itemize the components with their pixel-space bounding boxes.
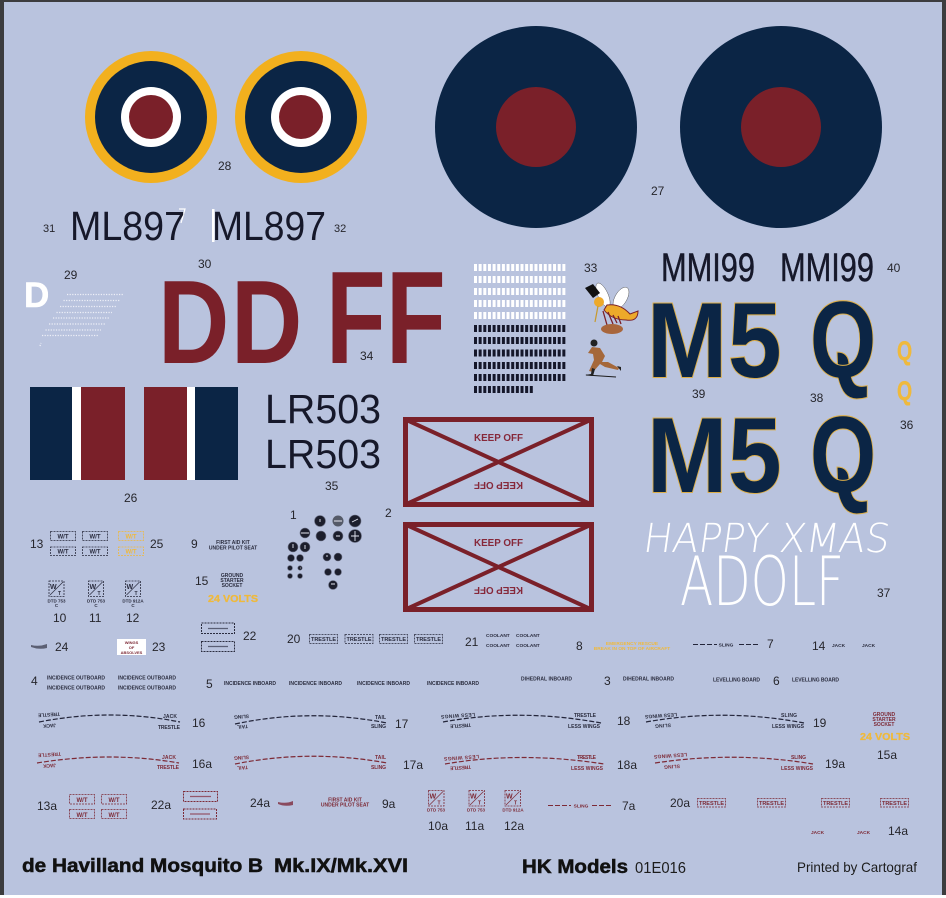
decal 21: coolant stencils: COOLANT [486, 643, 510, 649]
decal 23: white badge: 23 [152, 640, 166, 654]
decals 38 and 39: lower M5 Q code letters: M [647, 395, 727, 515]
decals 10 11 12: W/T weight stencils [47, 581, 144, 625]
decal 5: incidence inboard stencils: INCIDENCE INBOARD [289, 681, 342, 687]
decals 38 and 39: lower M5 Q code letters: 39 [692, 387, 706, 401]
decal 9: first aid kit stencil: UNDER PILOT SEAT [209, 546, 257, 552]
decals 10 11 12: W/T weight stencils: T [58, 591, 61, 597]
decal 19a: red sling less wings curved line [653, 751, 845, 772]
decals 10 11 12: W/T weight stencils: W [90, 584, 96, 591]
decal 7: sling line: 7 [767, 637, 774, 651]
decals 10a 11a 12a: red W/T stencils: T [438, 800, 441, 806]
decal 16a: red jack trestle curved line: JACK [42, 762, 56, 769]
decals 10 11 12: W/T weight stencils: C [131, 603, 135, 608]
title: aircraft name [22, 856, 408, 877]
decal 22a: red dashed placards: 22a [151, 798, 171, 812]
decal 15a: red ground starter socket [860, 712, 910, 762]
footer: printer credit: Printed by Cartograf [797, 859, 917, 875]
decal 35: serial LR503: LR503 [265, 431, 381, 477]
decal 35: serial LR503: LR503 [265, 386, 381, 432]
decal 23: white badge: WINGS [125, 640, 139, 645]
decals 38 and 39: lower M5 Q code letters [647, 387, 876, 515]
decals 10a 11a 12a: red W/T stencils: DTD 753 [467, 808, 485, 812]
walkway upper: KEEP OFF [474, 432, 524, 444]
decal 20: trestle boxes: TRESTLE [346, 637, 372, 643]
decal 19: sling less wings curved line: LESS WINGS [772, 724, 805, 730]
decal 40: serial MM199: MMI99 [780, 246, 874, 290]
decal 19: sling less wings curved line: LESS WINGS [644, 711, 677, 719]
decal 2: keep off walkway markings: 2 [385, 506, 392, 520]
decal 14: jack stencils: 14 [812, 639, 826, 653]
decal 4: incidence outboard stencils: INCIDENCE OUTBOARD [118, 676, 176, 682]
decal 17a: red tail sling curved line: TAIL [375, 755, 386, 761]
decal 13: black stencil tags: W/T [58, 534, 69, 540]
decal 9: first aid kit stencil: FIRST AID KIT [216, 540, 250, 546]
decal 18a: red trestle less wings curved line: TRESTLE [449, 763, 471, 771]
icon: running figure [585, 340, 621, 377]
decals 10 11 12: W/T weight stencils: 12 [126, 611, 140, 625]
decals 10a 11a 12a: red W/T stencils: DTD 912A [502, 808, 524, 812]
decal 15: ground starter socket and 24 volts [195, 573, 258, 605]
decal 19a: red sling less wings curved line: 19a [825, 757, 845, 771]
decal 9a: red first aid kit stencil [321, 797, 396, 811]
decal 17a: red tail sling curved line [234, 754, 423, 772]
decals 31 and 32: serial ML897 [43, 203, 346, 249]
decal 24: small squiggle stencil [31, 640, 69, 654]
decal 20a: red trestle boxes: TRESTLE [882, 801, 907, 807]
decal 3: dihedral inboard stencils: DIHEDRAL INBOARD [521, 676, 572, 682]
decal 27: pair of large type B roundels [435, 26, 882, 228]
decal 26: fin flash [30, 387, 238, 505]
decal 6: levelling board stencils: 6 [773, 674, 780, 688]
decal 1: instrument dials: 1 [290, 508, 297, 522]
decal 5: incidence inboard stencils: INCIDENCE INBOARD [427, 681, 479, 687]
decals 38 and 39: lower M5 Q code letters: Q [810, 394, 876, 515]
decal 16: jack trestle curved line: 16 [192, 716, 206, 730]
decal 9: first aid kit stencil [191, 537, 257, 552]
decal 33: mission tally bars: 33 [584, 261, 598, 275]
decal 23: white badge [117, 639, 166, 655]
decals 38 and 39: upper M5 Q code letters: M [647, 280, 727, 400]
walkway upper [406, 420, 592, 504]
decal 15a: red ground starter socket: STARTER [872, 717, 896, 723]
footer: manufacturer and product code: HK Models [522, 857, 628, 878]
decal 7a: red sling line: SLING [574, 804, 589, 810]
decal 34: red code letters FF [326, 244, 446, 391]
decal 6: levelling board stencils: LEVELLING BOARD [792, 678, 839, 684]
decal 20: trestle boxes: TRESTLE [311, 637, 336, 643]
decal 16: jack trestle curved line: TRESTLE [37, 710, 60, 718]
decals 38 and 39: lower M5 Q code letters: 38 [810, 391, 824, 405]
decal 24: small squiggle stencil: 24 [55, 640, 69, 654]
decal 15a: red ground starter socket: SOCKET [874, 722, 894, 728]
decal 20a: red trestle boxes: TRESTLE [759, 801, 784, 807]
decal 40: serial MM199: 40 [887, 261, 901, 275]
decal 16: jack trestle curved line: JACK [163, 714, 177, 720]
decal 40: serial MM199 [661, 246, 901, 290]
decal 15: ground starter socket and 24 volts: 15 [195, 574, 209, 588]
decal 16: jack trestle curved line: TRESTLE [158, 725, 181, 731]
decal 6: levelling board stencils [713, 674, 839, 688]
decal 33: mission tally bars [474, 261, 598, 390]
decal 19: sling less wings curved line: SLING [655, 721, 671, 729]
decal 20a: red trestle boxes: TRESTLE [823, 801, 848, 807]
decal 34: red code letters FF: F [326, 244, 386, 391]
footer: manufacturer and product code [522, 857, 686, 878]
decal 17: tail sling curved line: SLING [234, 713, 249, 720]
decal 18a: red trestle less wings curved line [443, 753, 637, 772]
decal 25: yellow stencil tags: W/T [126, 534, 137, 540]
decal 13a: red stencil tags: 13a [37, 799, 57, 813]
decal 4: incidence outboard stencils: INCIDENCE OUTBOARD [118, 686, 176, 692]
decal 18a: red trestle less wings curved line: LESS WINGS [571, 766, 604, 772]
decal 20a: red trestle boxes [670, 796, 908, 810]
decal 16: jack trestle curved line [37, 710, 206, 731]
decal 15: ground starter socket and 24 volts: GROUND [221, 573, 243, 579]
decal 23: white badge: OF [129, 645, 135, 650]
decals 38 and 39: lower M5 Q code letters: 5 [728, 395, 782, 515]
decals 38 and 39: upper M5 Q code letters: 5 [728, 280, 782, 400]
decal 17: tail sling curved line [234, 713, 409, 731]
walkway lower: KEEP OFF [473, 584, 523, 596]
decal 23: white badge: ABSOLVES [121, 650, 143, 655]
icon: mosquito nose art [585, 281, 638, 334]
decal 20: trestle boxes [287, 632, 442, 646]
decal 7a: red sling line: 7a [622, 799, 636, 813]
decal 22: dashed placards [202, 623, 257, 652]
title: aircraft name: de Havilland Mosquito B [22, 856, 263, 877]
decal 19: sling less wings curved line: 19 [813, 716, 827, 730]
decal 28: pair of type C1 roundels [85, 51, 367, 183]
decal 14a: red jack stencils: 14a [888, 824, 908, 838]
decal 17a: red tail sling curved line: 17a [403, 758, 423, 772]
decal 8: emergency rescue stencil [576, 639, 670, 653]
decal 14a: red jack stencils [811, 824, 908, 838]
decal 13a: red stencil tags: W/T [108, 813, 120, 819]
decals 10 11 12: W/T weight stencils: T [134, 591, 138, 597]
decal 29: white code letter and stencil stripes [24, 268, 123, 346]
decals 10 11 12: W/T weight stencils: W [50, 584, 57, 591]
decal 30: red code letters DD: 30 [198, 257, 212, 271]
decal 20a: red trestle boxes: TRESTLE [699, 801, 724, 807]
decal 16a: red jack trestle curved line: JACK [162, 755, 176, 761]
decal 13a: red stencil tags [37, 794, 126, 819]
decal 18a: red trestle less wings curved line: TRESTLE [577, 755, 597, 761]
decal 17a: red tail sling curved line: SLING [234, 754, 249, 761]
decal 36: small yellow Q letters: Q [897, 336, 912, 366]
decals 38 and 39: upper M5 Q code letters: Q [810, 279, 876, 400]
decal 37: hand written slogan [641, 516, 893, 622]
decals 10a 11a 12a: red W/T stencils [427, 790, 524, 833]
decal 7: sling line [693, 637, 774, 651]
decal 35: serial LR503 [265, 386, 381, 493]
decal 7: sling line: SLING [719, 642, 734, 648]
decals 10 11 12: W/T weight stencils: T [98, 591, 101, 597]
decal 14: jack stencils: JACK [862, 643, 876, 649]
decal 24a: red squiggle stencil: 24a [250, 796, 270, 810]
decal 13: black stencil tags: W/T [90, 534, 101, 540]
decal 40: serial MM199: MMI99 [661, 246, 755, 290]
decal 35: serial LR503: 35 [325, 479, 339, 493]
decal 19: sling less wings curved line [644, 711, 827, 730]
decal 18: trestle less wings curved line [440, 711, 631, 730]
decal 3: dihedral inboard stencils: 3 [604, 674, 611, 688]
decal 9a: red first aid kit stencil: FIRST AID KIT [328, 798, 362, 804]
decal 7a: red sling line [548, 799, 636, 813]
decal 36: small yellow Q letters: 36 [900, 418, 914, 432]
decal 37: hand written slogan: ADOLF [680, 543, 844, 622]
decal 30: red code letters DD [158, 256, 302, 389]
decal 21: coolant stencils [465, 633, 540, 649]
decals 10 11 12: W/T weight stencils: DTD 912A [122, 598, 144, 604]
decal 20: trestle boxes: TRESTLE [416, 637, 441, 643]
decal 14a: red jack stencils: JACK [811, 830, 825, 836]
decal 9a: red first aid kit stencil: UNDER PILOT SEAT [321, 802, 369, 808]
decal 18a: red trestle less wings curved line: LESS WINGS [443, 753, 479, 761]
decal 5: incidence inboard stencils: 5 [206, 677, 213, 691]
walkway upper: KEEP OFF [473, 479, 523, 491]
decal 21: coolant stencils: COOLANT [516, 633, 540, 639]
decals 10a 11a 12a: red W/T stencils: 12a [504, 819, 524, 833]
decal 4: incidence outboard stencils: INCIDENCE OUTBOARD [47, 686, 105, 692]
decals 10a 11a 12a: red W/T stencils: W [470, 794, 477, 800]
decal 15a: red ground starter socket: 24 VOLTS [860, 732, 910, 743]
decal 15: ground starter socket and 24 volts: STARTER [220, 578, 244, 584]
decals 10a 11a 12a: red W/T stencils: 10a [428, 819, 448, 833]
decal 18: trestle less wings curved line: TRESTLE [574, 713, 597, 719]
decal 9: first aid kit stencil: 9 [191, 537, 198, 551]
decal 14: jack stencils [812, 639, 876, 653]
decal 4: incidence outboard stencils [31, 674, 176, 692]
decal 26: fin flash: 26 [124, 491, 138, 505]
decal 14: jack stencils: JACK [832, 643, 846, 649]
decals 10 11 12: W/T weight stencils: 10 [53, 611, 67, 625]
decals 31 and 32: serial ML897: ML897 [70, 203, 185, 249]
decal 8: emergency rescue stencil: BREAK IN ON TOP OF AIRCRAFT [594, 646, 670, 652]
decals 10a 11a 12a: red W/T stencils: W [506, 794, 513, 800]
decal 5: incidence inboard stencils: INCIDENCE INBOARD [224, 681, 276, 687]
decal 2: keep off walkway markings [385, 420, 592, 610]
decal 17a: red tail sling curved line: TAIL [237, 764, 248, 770]
decal 30: red code letters DD: D [158, 256, 229, 389]
decal 19a: red sling less wings curved line: LESS WINGS [653, 751, 687, 759]
decal 13: black stencil tags: 13 [30, 537, 44, 551]
decal 25: yellow stencil tags [118, 532, 164, 556]
decal 13: black stencil tags: W/T [90, 550, 101, 556]
decal 16a: red jack trestle curved line: TRESTLE [37, 750, 61, 758]
decals 38 and 39: upper M5 Q code letters [647, 279, 876, 400]
decals 10 11 12: W/T weight stencils: 11 [89, 611, 102, 625]
decals 31 and 32: serial ML897: ML897 [212, 203, 326, 249]
decal 25: yellow stencil tags: 25 [150, 537, 164, 551]
footer: manufacturer and product code: 01E016 [635, 860, 686, 877]
decal 17: tail sling curved line: 17 [395, 717, 409, 731]
decal 5: incidence inboard stencils [206, 677, 479, 691]
decal 28: pair of type C1 roundels: 28 [218, 159, 232, 173]
decal 15: ground starter socket and 24 volts: SOCKET [222, 583, 242, 589]
decal 17: tail sling curved line: TAIL [237, 723, 248, 729]
decal 18: trestle less wings curved line: 18 [617, 714, 631, 728]
decals 10a 11a 12a: red W/T stencils: T [514, 800, 517, 806]
decal 16a: red jack trestle curved line [37, 750, 212, 771]
decal 13a: red stencil tags: W/T [108, 798, 120, 804]
decal 21: coolant stencils: COOLANT [516, 643, 540, 649]
decal 1: instrument dials [288, 508, 362, 590]
decal 18a: red trestle less wings curved line: 18a [617, 758, 637, 772]
decals 10a 11a 12a: red W/T stencils: T [478, 800, 481, 806]
decal 13a: red stencil tags: W/T [76, 813, 88, 819]
decal 21: coolant stencils: COOLANT [486, 633, 510, 639]
decal 20: trestle boxes: TRESTLE [381, 637, 406, 643]
decal 19a: red sling less wings curved line: SLING [791, 755, 806, 761]
decal 18: trestle less wings curved line: TRESTLE [449, 721, 471, 729]
decal 17a: red tail sling curved line: SLING [371, 765, 386, 771]
decal 18: trestle less wings curved line: LESS WINGS [568, 724, 601, 730]
decal 20: trestle boxes: 20 [287, 632, 301, 646]
decal 15a: red ground starter socket: 15a [877, 748, 897, 762]
decal 8: emergency rescue stencil: 8 [576, 639, 583, 653]
decals 10 11 12: W/T weight stencils: DTD 753 [87, 598, 105, 604]
decals 10 11 12: W/T weight stencils: C [94, 603, 98, 608]
decal 30: red code letters DD: D [231, 256, 302, 389]
decal 17: tail sling curved line: TAIL [375, 715, 386, 721]
decal 29: white code letter and stencil stripes: D [24, 276, 49, 315]
decal 9a: red first aid kit stencil: 9a [382, 797, 396, 811]
decal 8: emergency rescue stencil: EMERGENCY RESCUE [606, 641, 659, 647]
decal 15: ground starter socket and 24 volts: 24 VOLTS [208, 594, 258, 605]
decal 19a: red sling less wings curved line: LESS WINGS [781, 766, 814, 772]
decals 10a 11a 12a: red W/T stencils: DTD 753 [427, 808, 445, 812]
decal 25: yellow stencil tags: W/T [126, 550, 137, 556]
decal 4: incidence outboard stencils: INCIDENCE OUTBOARD [47, 676, 105, 682]
decal 34: red code letters FF: F [386, 244, 446, 391]
walkway lower: KEEP OFF [474, 537, 524, 549]
decal 29: white code letter and stencil stripes: 29 [64, 268, 78, 282]
decals 10 11 12: W/T weight stencils: DTD 753 [47, 598, 66, 604]
decal 15a: red ground starter socket: GROUND [873, 712, 895, 718]
decal 16: jack trestle curved line: JACK [42, 722, 56, 729]
decal 36: small yellow Q letters [897, 336, 914, 432]
decal 37: hand written slogan: 37 [877, 586, 891, 600]
decal 19a: red sling less wings curved line: SLING [664, 762, 680, 770]
decal 14a: red jack stencils: JACK [857, 830, 871, 836]
decal 18: trestle less wings curved line: LESS WINGS [440, 711, 475, 719]
decal 22a: red dashed placards [151, 792, 218, 819]
decal 3: dihedral inboard stencils [521, 674, 674, 688]
decal 21: coolant stencils: 21 [465, 635, 479, 649]
decals 10a 11a 12a: red W/T stencils: W [430, 794, 436, 800]
decal 16a: red jack trestle curved line: TRESTLE [157, 765, 180, 771]
decal 20a: red trestle boxes: 20a [670, 796, 690, 810]
decals 10 11 12: W/T weight stencils: C [55, 603, 59, 608]
decal 24a: red squiggle stencil [250, 796, 293, 810]
decal 17: tail sling curved line: SLING [371, 724, 386, 730]
decal 36: small yellow Q letters: Q [897, 376, 912, 406]
decals 31 and 32: serial ML897: 32 [334, 223, 346, 235]
decal 13: black stencil tags [30, 532, 108, 556]
decal 4: incidence outboard stencils: 4 [31, 674, 38, 688]
title: aircraft name: Mk.IX/Mk.XVI [274, 856, 408, 877]
decal 3: dihedral inboard stencils: DIHEDRAL INBOARD [623, 676, 674, 682]
decal 22: dashed placards: 22 [243, 629, 257, 643]
decal 5: incidence inboard stencils: INCIDENCE INBOARD [357, 681, 410, 687]
walkway lower [406, 524, 592, 610]
decals 10a 11a 12a: red W/T stencils: 11a [465, 819, 484, 833]
decals 10 11 12: W/T weight stencils: W [126, 584, 134, 591]
decal 16a: red jack trestle curved line: 16a [192, 757, 212, 771]
decal 27: pair of large type B roundels: 27 [651, 184, 665, 198]
decal 6: levelling board stencils: LEVELLING BOARD [713, 678, 760, 684]
decal 19: sling less wings curved line: SLING [781, 713, 797, 719]
decal 13a: red stencil tags: W/T [76, 798, 88, 804]
decal 34: red code letters FF: 34 [360, 349, 374, 363]
decals 31 and 32: serial ML897: 31 [43, 223, 55, 235]
decal 13: black stencil tags: W/T [58, 550, 69, 556]
decal 37: hand written slogan: HAPPY XMAS [641, 516, 893, 562]
